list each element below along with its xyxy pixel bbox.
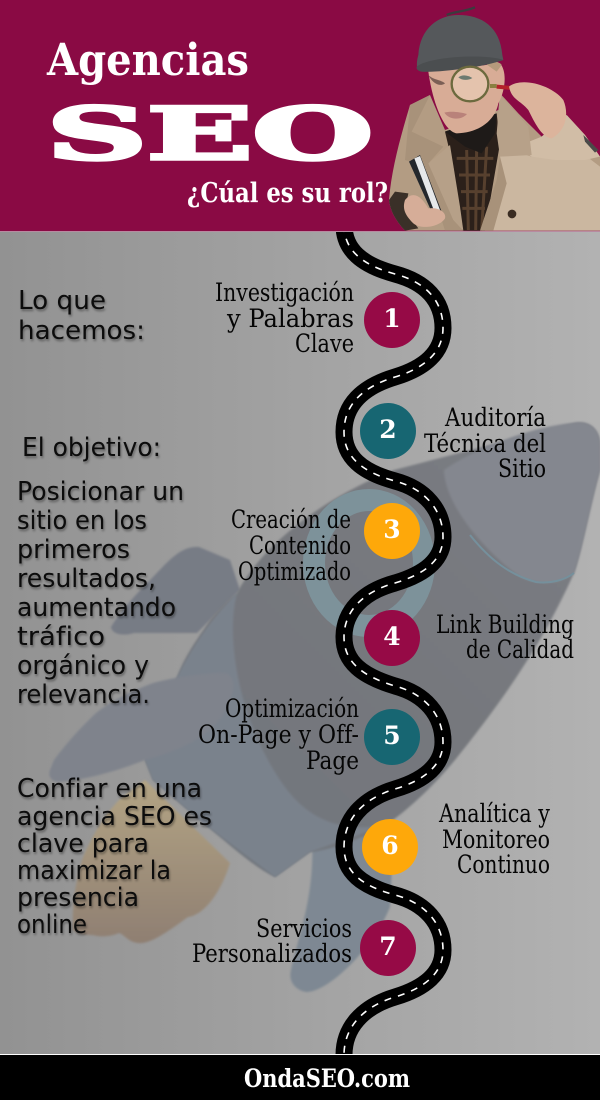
text block: confiar: clave para [17,829,149,859]
label [231,505,351,586]
rocket lower fin [290,800,392,992]
detective magnifying glass [452,67,516,101]
label: de Calidad [466,635,574,664]
text block: objetivo [17,477,184,710]
badge: 6 [381,831,399,860]
step 6 [362,799,551,879]
detective lapels [405,95,463,231]
label [436,610,574,664]
label: Continuo [457,850,550,879]
text block: confiar [17,774,212,940]
heading: Lo que hacemos: hacemos: [18,316,145,346]
label: On-Page y Off- [198,720,359,749]
text block: objetivo: sitio en los [17,506,147,536]
badge: 3 [383,515,401,544]
rocket body [145,422,600,877]
badge [364,292,420,348]
text block: confiar: agencia SEO es [17,802,212,832]
panel: header [0,0,600,232]
badge [364,503,420,559]
step 3 [231,503,420,586]
title: SEO: SEO [47,91,373,176]
footer [0,1054,600,1100]
label: Sitio [498,454,546,483]
label: y Palabras [226,304,354,333]
text block: confiar: maximizar la [17,856,171,886]
step 7 [192,914,416,976]
badge [364,709,420,765]
label [192,914,352,968]
rocket upper fin [111,547,240,635]
detective face [428,63,505,133]
rocket window ring [314,500,424,626]
rocket flame [73,780,230,943]
label: Analítica y [438,799,551,828]
label: Optimización [225,694,359,723]
label: Creación de [231,505,351,534]
label: Optimizado [238,557,351,586]
badge: 1 [383,304,401,333]
label: Contenido [249,531,351,560]
label: Page [306,746,359,775]
step 5 [198,694,420,775]
detective hand [509,82,566,138]
text block: objetivo: resultados, [17,564,156,594]
badge [362,819,418,875]
illustration: rocket [49,422,600,992]
heading: Lo que hacemos [18,286,145,346]
step 1 [215,278,420,358]
text block: objetivo: tráfico [17,622,105,652]
label [438,799,551,879]
text block: objetivo: Posicionar un [17,477,184,507]
text block: objetivo: relevancia. [17,680,150,710]
text block: objetivo: orgánico y [17,651,149,681]
label [424,403,546,483]
step 2 [360,403,546,483]
rocket nose cone [444,422,600,583]
label: Personalizados [192,939,352,968]
step 4 [364,610,574,666]
badge [360,920,416,976]
text block: confiar: presencia [17,883,139,913]
text block: confiar: online [17,910,87,940]
label: Servicios [256,914,352,943]
label: Auditoría [444,403,546,432]
badge [360,403,416,459]
subtitle: ¿Cúal es su rol? [187,178,388,209]
detective coat [389,93,600,231]
road [344,225,443,1055]
text block: confiar: Confiar en una [17,774,202,804]
illustration: detective [389,7,600,231]
label [215,278,354,358]
detective left hand [404,195,445,227]
detective hat [417,7,503,72]
rocket left fin [49,673,233,782]
footer text: OndaSEO.com [244,1064,410,1093]
detective book [409,155,442,216]
text block: objetivo: primeros [17,535,130,565]
label: Investigación [215,278,354,307]
badge: 2 [379,415,397,444]
title: Agencias: Agencias [46,35,249,86]
label: Clave [295,329,354,358]
badge: 4 [383,622,401,651]
badge: 5 [383,721,401,750]
badge [364,610,420,666]
rocket rear highlight [145,593,386,877]
label [198,694,359,775]
badge: 7 [379,932,397,961]
label: Monitoreo [442,825,550,854]
heading: Lo que hacemos: Lo que [18,286,106,316]
heading: El objetivo: El objetivo: [22,433,161,463]
detective shirt [445,113,500,231]
text block: objetivo: aumentando [17,593,176,623]
panel: gray background [0,231,600,1055]
label: Técnica del [424,429,546,458]
